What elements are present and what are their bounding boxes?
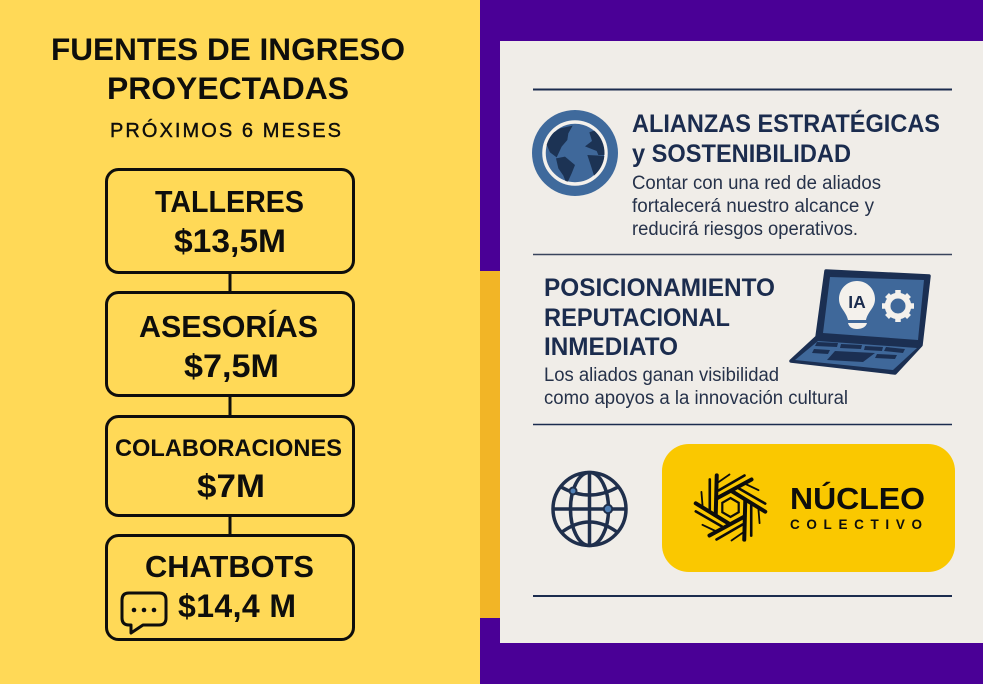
icon: laptop: IA bbox=[848, 292, 866, 312]
heading: alianzas bbox=[632, 109, 940, 168]
card: asesorias: $7,5M bbox=[184, 348, 279, 384]
icon: laptop bbox=[791, 271, 929, 373]
card: colaboraciones: $7M bbox=[197, 468, 265, 504]
wordmark: colectivo: COLECTIVO bbox=[790, 517, 922, 532]
text: alianzas: Contar con una red de aliados bbox=[632, 173, 881, 194]
heading: posicionamiento: REPUTACIONAL bbox=[544, 304, 730, 332]
heading: alianzas: ALIANZAS ESTRATÉGICAS bbox=[632, 109, 940, 138]
heading: posicionamiento: POSICIONAMIENTO bbox=[544, 274, 775, 302]
card: nucleo colectivo logo bbox=[662, 444, 955, 572]
text: alianzas: fortalecerá nuestro alcance y bbox=[632, 196, 874, 217]
text: posicionamiento: Los aliados ganan visibilidad bbox=[544, 365, 779, 386]
card: talleres: $13,5M bbox=[174, 223, 286, 259]
card: asesorias bbox=[106, 292, 354, 396]
text: alianzas: reducirá riesgos operativos. bbox=[632, 219, 858, 240]
icon: network globe bbox=[553, 472, 626, 546]
title bbox=[51, 31, 405, 106]
heading: alianzas: y SOSTENIBILIDAD bbox=[632, 140, 851, 168]
panel: fuentes de ingreso bbox=[51, 31, 405, 640]
connectors bbox=[228, 273, 232, 535]
text: posicionamiento: como apoyos a la innovación cultural bbox=[544, 388, 848, 409]
icon: chat bubble bbox=[122, 593, 166, 633]
heading: posicionamiento: INMEDIATO bbox=[544, 333, 678, 361]
card: chatbots: $14,4 M bbox=[178, 588, 296, 624]
icon: hexagonal emblem bbox=[691, 473, 770, 542]
heading: posicionamiento bbox=[544, 274, 775, 361]
wordmark: nucleo: NÚCLEO bbox=[790, 480, 925, 516]
card: talleres: TALLERES bbox=[155, 185, 304, 219]
card: chatbots bbox=[106, 536, 354, 640]
text: posicionamiento bbox=[544, 365, 848, 409]
card: talleres bbox=[106, 170, 354, 272]
card: colaboraciones: COLABORACIONES bbox=[115, 435, 342, 462]
card: asesorias: ASESORÍAS bbox=[139, 309, 318, 344]
panel: beneficios bbox=[500, 41, 983, 643]
title: PROYECTADAS bbox=[107, 70, 349, 106]
subtitle: PRÓXIMOS 6 MESES bbox=[110, 119, 341, 142]
text: alianzas bbox=[632, 173, 881, 240]
icon: earth globe bbox=[532, 110, 618, 196]
card: colaboraciones bbox=[106, 416, 354, 516]
title: FUENTES DE INGRESO bbox=[51, 31, 405, 67]
card: chatbots: CHATBOTS bbox=[145, 550, 314, 584]
